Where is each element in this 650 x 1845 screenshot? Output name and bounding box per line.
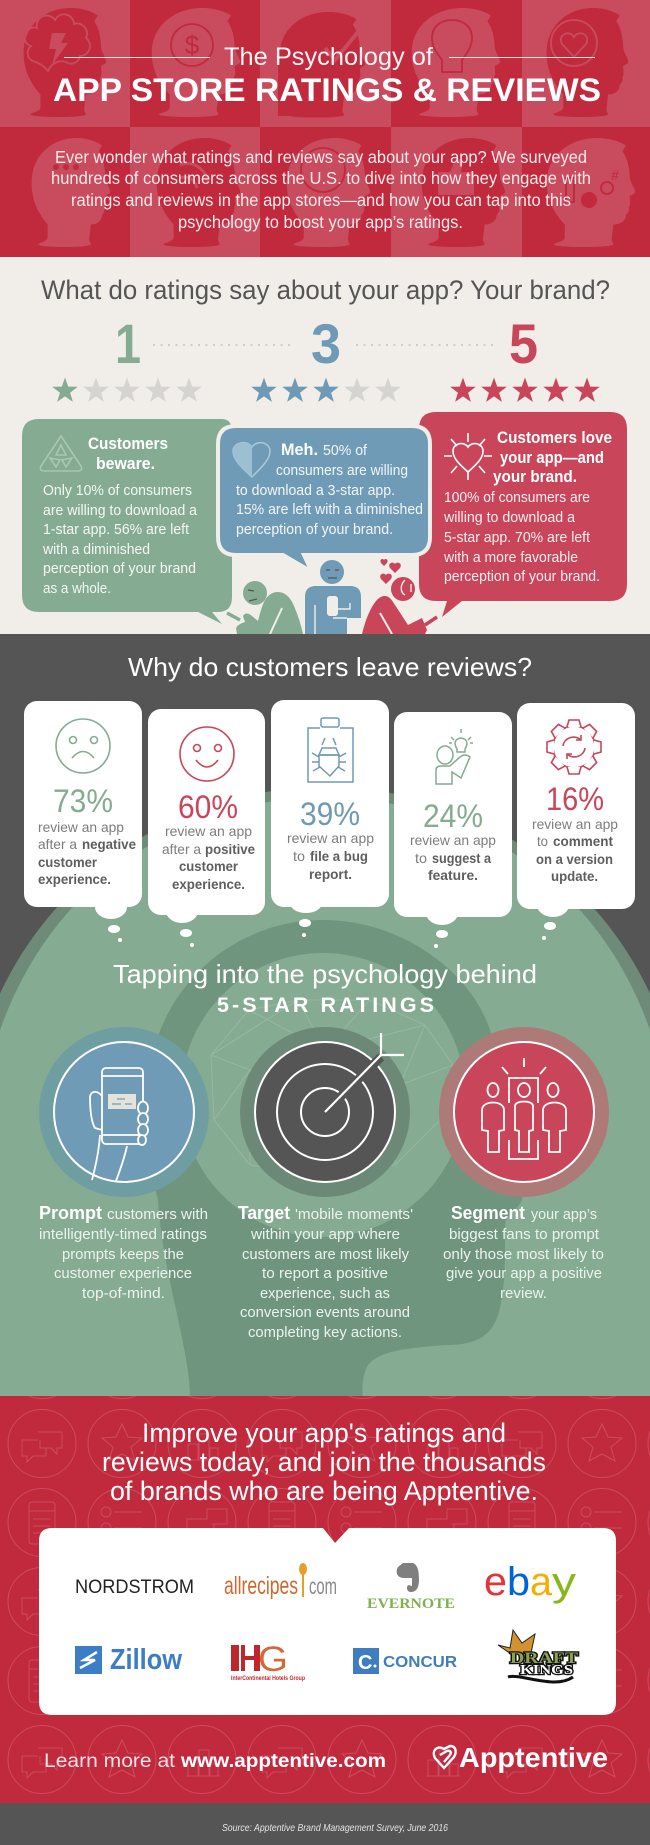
text: customers beware <box>42 434 198 597</box>
intro paragraph: psychology to boost your app’s ratings. <box>178 212 463 232</box>
text: meh: 50% of <box>323 443 368 459</box>
head silhouette <box>148 920 523 1397</box>
text: target: completing key actions. <box>248 1324 402 1341</box>
logo: Concur: CONCUR <box>383 1654 457 1671</box>
stars: one of five <box>52 378 202 402</box>
bubble: five star <box>419 412 627 617</box>
icon: sad face <box>56 719 110 773</box>
caption: to <box>537 833 548 849</box>
card: negative experience <box>24 701 142 942</box>
text: segment: only those most likely to <box>443 1246 604 1263</box>
logo: Concur <box>353 1648 457 1674</box>
logo: Zillow: Zillow <box>110 1644 182 1676</box>
text: customers love: your brand. <box>493 467 577 486</box>
text: customers beware: with a diminished <box>42 542 150 558</box>
text: prompt: top-of-mind. <box>82 1285 165 1302</box>
heading: tapping into the psychology: Tapping into the psychology behind <box>113 959 537 989</box>
text: meh: consumers are willing <box>276 463 408 479</box>
text: segment: give your app a positive <box>446 1265 602 1282</box>
caption: on a version <box>536 851 613 867</box>
stat 24%: 24% <box>423 798 483 834</box>
text: customers beware: 1-star app. 56% are left <box>43 522 189 538</box>
icon: head with hash and flower <box>547 138 635 247</box>
text: meh: 15% are left with a diminished <box>236 502 423 518</box>
intro paragraph: ratings and reviews in the app stores—and how you can tap into this <box>71 190 571 210</box>
logo: DraftKings: DRAFT <box>510 1650 578 1667</box>
learn more link: Learn more at <box>44 1750 176 1772</box>
caption <box>410 832 496 883</box>
logo: eBay: a <box>530 1560 553 1604</box>
dark background <box>0 634 650 1397</box>
card: bug report <box>271 700 389 937</box>
text: prompt <box>39 1202 208 1302</box>
text: customers love: your app—and <box>500 448 604 467</box>
caption: to <box>293 848 305 864</box>
panel: why customers leave reviews <box>0 634 650 1396</box>
logo: DraftKings: KINGS <box>520 1663 573 1678</box>
figure: unhappy person <box>227 581 303 634</box>
stars: three of five <box>251 378 401 402</box>
text: customers love: Customers love <box>497 428 612 447</box>
caption: after a <box>162 841 201 857</box>
logo: Evernote <box>367 1563 455 1612</box>
title line 2: APP STORE RATINGS & REVIEWS <box>53 72 601 108</box>
icon: head with dollar: $ <box>185 30 200 60</box>
caption: review an app <box>532 816 618 832</box>
logo: DraftKings <box>498 1630 578 1682</box>
call to action text: reviews today, and join the thousands <box>102 1447 546 1477</box>
text: prompt: Prompt <box>39 1202 102 1223</box>
number 3: 3 <box>311 312 341 375</box>
title line 1: The Psychology of <box>224 43 433 71</box>
stars: five of five <box>450 378 600 402</box>
text: customers beware: perception of your brand <box>43 561 196 577</box>
caption: positive <box>205 841 255 857</box>
logo: eBay: b <box>507 1560 530 1604</box>
icon: head with dollar <box>152 8 240 117</box>
text: segment: Segment <box>451 1202 525 1223</box>
background icon pattern <box>0 1396 650 1803</box>
text: customers love: 100% of consumers are <box>444 490 590 506</box>
panel: source footer <box>0 1803 650 1845</box>
icon: head with brain and lightning <box>24 8 106 117</box>
title rule left <box>64 57 210 58</box>
text: target: to report a positive <box>262 1265 388 1282</box>
icon: head with hash and flower: # <box>611 167 619 183</box>
text: target: 'mobile moments' <box>295 1206 413 1223</box>
circle: target <box>240 1027 410 1197</box>
head inner circle <box>181 953 465 1237</box>
caption: report. <box>309 866 352 882</box>
text: customers love: 5-star app. 70% are left <box>444 530 590 546</box>
figure: happy person with hearts <box>362 559 437 634</box>
logo: Zillow <box>75 1644 182 1676</box>
icon: radiation triangle <box>40 436 82 471</box>
dotted connector right <box>356 344 497 346</box>
learn more link: www.apptentive.com <box>180 1750 386 1772</box>
text: target: experience, such as <box>260 1285 390 1302</box>
text: target: within your app where <box>250 1226 400 1243</box>
icon: person with light bulb <box>436 729 473 784</box>
caption: update. <box>551 868 598 884</box>
logo: allrecipes: allrecipes <box>224 1572 298 1600</box>
text: meh: perception of your brand. <box>236 522 393 538</box>
header panel <box>0 0 650 258</box>
text: customers beware: as a whole. <box>43 581 111 597</box>
caption <box>532 816 618 884</box>
bubble: one star <box>22 419 232 624</box>
text: customers beware: Only 10% of consumers <box>43 483 192 499</box>
icon: half heart <box>233 443 270 477</box>
caption: experience. <box>172 876 245 892</box>
text: meh: Meh. <box>281 440 318 459</box>
figure: neutral person <box>305 560 361 634</box>
text: target: Target <box>238 1202 290 1223</box>
call to action text: of brands who are being Apptentive. <box>110 1476 538 1506</box>
card: version update <box>517 703 635 940</box>
heading: Why do customers leave reviews? <box>128 652 532 682</box>
text: segment <box>443 1202 604 1302</box>
card: positive experience <box>148 709 265 947</box>
learn more link <box>44 1750 386 1772</box>
text: customers beware: beware. <box>96 454 155 473</box>
caption: customer <box>179 858 239 874</box>
caption <box>162 823 255 892</box>
source note: Source: Apptentive Brand Management Survey, June 2016 <box>222 1822 448 1834</box>
stat 16%: 16% <box>546 781 604 817</box>
header checker background <box>0 0 650 258</box>
icon: head with heart <box>547 8 628 117</box>
caption: review an app <box>287 830 374 846</box>
caption: file a bug <box>310 848 368 864</box>
text: prompt: customers with <box>107 1206 208 1223</box>
call to action text: Improve your app's ratings and <box>142 1418 506 1448</box>
icon: bullseye with arrow <box>277 1033 404 1160</box>
logo panel <box>39 1528 616 1715</box>
icon: glowing heart <box>444 433 492 480</box>
stat 39%: 39% <box>300 796 360 832</box>
icon: head with thumbs up <box>422 138 505 247</box>
text: segment: biggest fans to prompt <box>449 1226 600 1243</box>
logo: Nordstrom: NORDSTROM <box>75 1577 194 1598</box>
text: prompt: prompts keeps the <box>62 1246 184 1263</box>
text: target <box>238 1202 413 1341</box>
text: prompt: customer experience <box>54 1265 192 1282</box>
logo: allrecipes: com <box>309 1573 337 1599</box>
intro paragraph: Ever wonder what ratings and reviews say about your app? We surveyed <box>55 147 587 167</box>
icon: head with speech bubble <box>32 138 110 247</box>
logo: IHG: InterContinental Hotels Group <box>231 1675 305 1682</box>
caption: review an app <box>410 832 496 848</box>
brain network lines <box>211 1000 453 1175</box>
text: target: customers are most likely <box>242 1246 409 1263</box>
caption: to <box>415 850 427 866</box>
caption: suggest a <box>432 850 491 866</box>
dotted connector left <box>153 344 294 346</box>
intro paragraph <box>51 147 591 232</box>
caption: negative <box>82 836 136 852</box>
icon: happy face <box>180 727 234 781</box>
caption <box>287 830 374 882</box>
logo: eBay: e <box>484 1560 507 1604</box>
logo: Evernote: EVERNOTE <box>367 1596 455 1612</box>
text: target: conversion events around <box>240 1304 410 1321</box>
panel background <box>0 257 650 634</box>
caption: review an app <box>38 819 124 835</box>
caption: feature. <box>428 867 478 883</box>
logo: Apptentive: Apptentive <box>459 1742 608 1773</box>
heading: What do ratings say about your app? Your brand? <box>41 275 610 305</box>
caption: after a <box>38 836 77 852</box>
text: customers beware: are willing to download a <box>43 503 198 519</box>
bubble: three star <box>218 426 430 572</box>
head outer ring <box>0 787 650 1505</box>
head green fill <box>0 797 650 1397</box>
icon: head with signal arcs <box>157 138 240 247</box>
text: customers love: willing to download a <box>443 510 576 526</box>
text: meh <box>236 440 423 538</box>
call to action text <box>102 1418 546 1506</box>
icon: hand holding phone <box>90 1068 148 1181</box>
intro paragraph: hundreds of consumers across the U.S. to dive into how they engage with <box>51 168 591 188</box>
title rule right <box>449 57 595 58</box>
caption: review an app <box>165 823 252 839</box>
icon: head with face <box>287 138 370 247</box>
logo: IHG <box>231 1640 305 1682</box>
caption <box>38 819 136 887</box>
number 1: 1 <box>115 312 141 375</box>
caption: comment <box>553 833 613 849</box>
circle: segment <box>439 1027 609 1197</box>
text: meh: to download a 3-star app. <box>236 483 395 499</box>
text: prompt: intelligently-timed ratings <box>39 1226 207 1243</box>
icon: three people highlighted <box>482 1058 566 1159</box>
icon: head with checkmark <box>278 12 365 118</box>
logo: Concur: C <box>358 1652 372 1674</box>
logo: eBay: y <box>552 1560 576 1604</box>
icon: head with light bulb <box>412 8 500 117</box>
heading: 5-star ratings: 5-STAR RATINGS <box>217 993 434 1017</box>
caption: customer <box>38 854 98 870</box>
text: segment: review. <box>500 1285 547 1302</box>
text: segment: your app’s <box>531 1206 597 1223</box>
icon: gear with refresh arrows <box>547 720 601 774</box>
text: customers love <box>443 428 612 585</box>
icon: bug on clipboard <box>308 718 353 782</box>
panel: call to action <box>0 1396 650 1803</box>
caption: experience. <box>38 871 111 887</box>
text: customers love: perception of your brand. <box>444 569 600 585</box>
red background <box>0 1396 650 1803</box>
stat 60%: 60% <box>178 789 238 825</box>
stat 73%: 73% <box>53 783 113 819</box>
card: suggest feature <box>394 712 512 948</box>
text: customers love: with a more favorable <box>443 550 578 566</box>
logo: IHG: G <box>258 1640 288 1679</box>
logo: eBay <box>484 1560 576 1604</box>
number 5: 5 <box>509 312 538 375</box>
circle: prompt <box>39 1027 209 1197</box>
text: customers beware: Customers <box>88 434 168 453</box>
panel: what ratings say <box>0 257 650 634</box>
